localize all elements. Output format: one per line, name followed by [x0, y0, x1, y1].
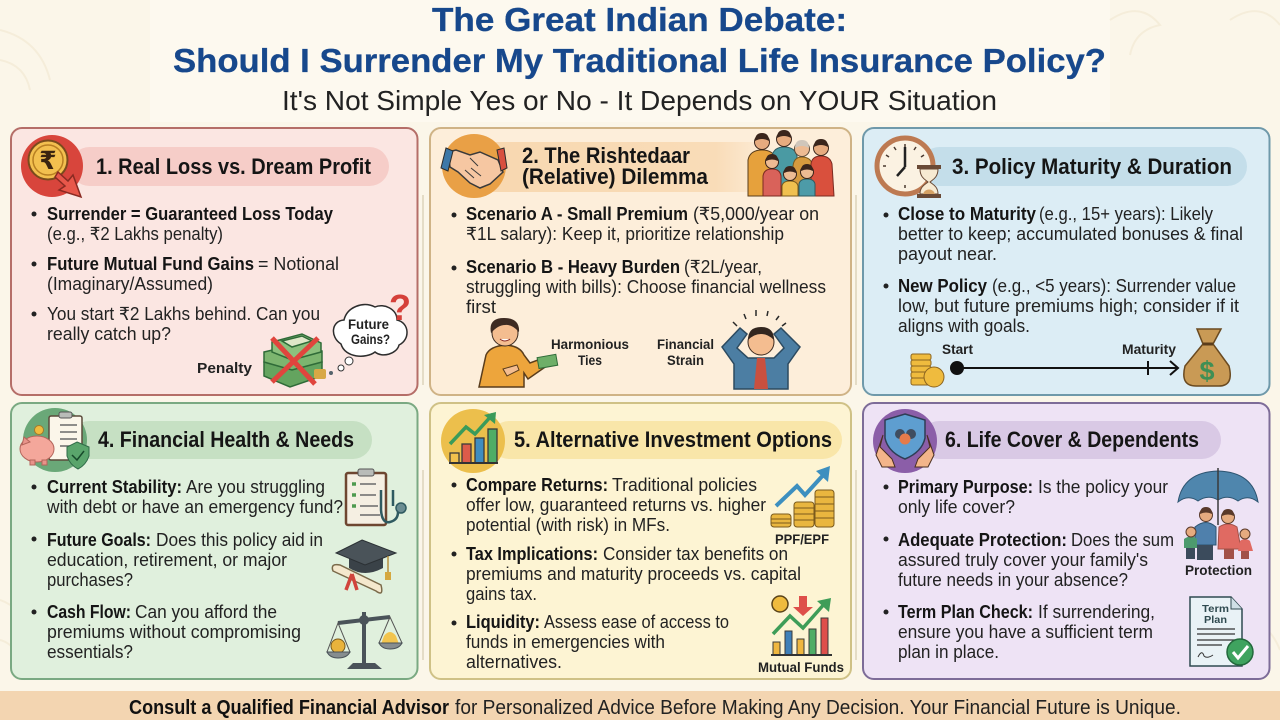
bullets 5: Traditional policies	[612, 475, 757, 495]
bullets 4	[32, 477, 343, 662]
bullets 6: Primary Purpose:	[898, 477, 1033, 497]
icon: clipboard and stethoscope	[346, 469, 406, 525]
icon: mutual funds chart: Mutual Funds	[758, 659, 844, 675]
heading pill 6	[920, 421, 1221, 459]
icon: crossed-out penalty cash: Penalty	[197, 360, 253, 377]
bullets 1: (Imaginary/Assumed)	[47, 274, 213, 294]
bullets 3: better to keep; accumulated bonuses & final	[898, 224, 1243, 244]
bullets 2: Scenario A - Small Premium	[466, 204, 688, 224]
bullets 4: Can you afford the	[135, 602, 277, 622]
icon: PPF/EPF coin growth: PPF/EPF	[775, 531, 829, 547]
timeline arrow: Start	[942, 341, 973, 357]
icon: balance scales	[327, 612, 402, 669]
bullets 3: Close to Maturity	[898, 204, 1036, 224]
bullets 3: (e.g., 15+ years): Likely	[1039, 204, 1213, 224]
label: financial strain	[657, 336, 714, 368]
label: harmonious ties: Ties	[578, 352, 602, 368]
heading pill 5	[490, 421, 842, 459]
bullets 1	[32, 204, 339, 344]
bullets 2: (₹5,000/year on	[693, 204, 819, 224]
icon: graduation cap and diploma	[332, 540, 396, 593]
thought cloud: future gains: ?	[389, 287, 411, 328]
bullets 5: funds in emergencies with	[466, 632, 665, 652]
bullets 4: Current Stability:	[47, 477, 182, 497]
thought cloud: future gains: Gains?	[351, 332, 390, 347]
bullets 5: gains tax.	[466, 584, 537, 604]
heading band 2	[490, 142, 772, 192]
bullets 3: payout near.	[898, 244, 997, 264]
icon: clock and hourglass	[877, 138, 941, 198]
heading pill 5: 5. Alternative Investment Options	[514, 427, 832, 452]
label: harmonious ties: Harmonious	[551, 336, 629, 352]
panel: policy maturity	[863, 128, 1270, 395]
label: financial strain: Strain	[667, 352, 704, 368]
label: harmonious ties	[551, 336, 629, 368]
icon: piggy bank and checklist	[20, 408, 89, 472]
bullets 6: Is the policy your	[1038, 477, 1168, 497]
bullets 1: = Notional	[258, 254, 339, 274]
bullets 4: with debt or have an emergency fund?	[46, 497, 343, 517]
icon: falling rupee coin	[21, 135, 83, 197]
bullets 6	[884, 477, 1174, 662]
bullets 2: first	[466, 297, 496, 317]
icon: money bag: $	[1199, 356, 1215, 386]
bullets 4: premiums without compromising	[47, 622, 301, 642]
bullets 3: (e.g., <5 years): Surrender value	[992, 276, 1236, 296]
bullets 4: Does this policy aid in	[156, 530, 323, 550]
bullets 6: future needs in your absence?	[898, 570, 1128, 590]
bullets 6: Adequate Protection:	[898, 530, 1067, 550]
icon: term plan document: Plan	[1204, 614, 1227, 626]
bullets 6: If surrendering,	[1038, 602, 1155, 622]
panel: rishtedaar dilemma	[430, 128, 851, 395]
bullets 2: Scenario B - Heavy Burden	[466, 257, 680, 277]
footer banner: for Personalized Advice Before Making Any Decision. Your Financial Future is Unique.	[455, 697, 1181, 719]
icon: umbrella over family: Protection	[1185, 562, 1252, 578]
bullets 1: Future Mutual Fund Gains	[47, 254, 254, 274]
bullets 4: Are you struggling	[186, 477, 325, 497]
bullets 5: Liquidity:	[466, 612, 540, 632]
thought cloud: future gains	[329, 287, 411, 375]
icon: money bag	[1184, 329, 1230, 386]
icon: crossed-out penalty cash	[197, 334, 326, 387]
bullets 3: New Policy	[898, 276, 987, 296]
bullets 3: aligns with goals.	[898, 316, 1030, 336]
icon: mutual funds chart	[758, 596, 844, 675]
panel: real loss vs dream profit	[11, 128, 418, 395]
heading band 2: 2. The Rishtedaar	[522, 143, 690, 168]
bullets 5: Assess ease of access to	[544, 612, 729, 632]
bullets 4: essentials?	[47, 642, 133, 662]
heading pill 3: 3. Policy Maturity & Duration	[952, 154, 1232, 179]
bullets 1: You start ₹2 Lakhs behind. Can you	[47, 304, 320, 324]
heading pill 4	[70, 421, 372, 459]
icon: falling rupee coin: ₹	[39, 147, 57, 175]
title	[173, 1, 1106, 79]
panel: alternative investments	[430, 403, 851, 679]
bullets 5: premiums and maturity proceeds vs. capital	[466, 564, 801, 584]
footer banner: Consult a Qualified Financial Advisor	[129, 697, 449, 719]
bullets 3	[884, 204, 1243, 336]
icon: term plan document: Term	[1202, 603, 1229, 615]
bullets 6: plan in place.	[898, 642, 999, 662]
icon: smiling man with cash	[479, 318, 558, 387]
icon: umbrella over family	[1178, 468, 1258, 578]
bullets 6: Does the sum	[1071, 530, 1174, 550]
bullets 2: (₹2L/year,	[684, 257, 762, 277]
bullets 1: Surrender = Guaranteed Loss Today	[47, 204, 333, 224]
bullets 5: Consider tax benefits on	[603, 544, 788, 564]
bullets 2: struggling with bills): Choose financial wellness	[466, 277, 826, 297]
panel: life cover	[863, 403, 1270, 679]
bullets 5: alternatives.	[466, 652, 562, 672]
icon: term plan document	[1190, 597, 1253, 666]
heading pill 3	[920, 147, 1247, 186]
title: Should I Surrender My Traditional Life Insurance Policy?	[173, 42, 1106, 79]
bullets 5: Compare Returns:	[466, 475, 608, 495]
bullets 2	[452, 204, 826, 317]
bullets 5: Tax Implications:	[466, 544, 598, 564]
thought cloud: future gains: Future	[348, 317, 389, 332]
heading pill 1	[70, 147, 389, 186]
timeline arrow: Maturity	[1122, 341, 1176, 357]
title: The Great Indian Debate:	[432, 1, 847, 38]
bullets 2: ₹1L salary): Keep it, prioritize relationship	[466, 224, 784, 244]
subtitle: It's Not Simple Yes or No - It Depends on YOUR Situation	[282, 85, 997, 116]
bullets 6: ensure you have a sufficient term	[898, 622, 1153, 642]
bullets 6: only life cover?	[898, 497, 1015, 517]
icon: family group	[748, 130, 834, 196]
footer banner	[0, 691, 1280, 720]
bullets 1: (e.g., ₹2 Lakhs penalty)	[47, 224, 223, 244]
icon: shield held by hands	[873, 409, 937, 473]
icon: rising bar chart	[441, 409, 505, 473]
panel: financial health	[11, 403, 418, 679]
heading pill 4: 4. Financial Health & Needs	[98, 427, 354, 452]
icon: handshake	[441, 134, 507, 198]
bullets 4: education, retirement, or major	[47, 550, 287, 570]
bullets 1: really catch up?	[47, 324, 171, 344]
bullets 3: low, but future premiums high; consider if it	[898, 296, 1239, 316]
bullets 6: Term Plan Check:	[898, 602, 1033, 622]
bullets 4: Future Goals:	[47, 530, 151, 550]
bullets 5: potential (with risk) in MFs.	[466, 515, 670, 535]
heading pill 6: 6. Life Cover & Dependents	[945, 427, 1199, 452]
bullets 6: assured truly cover your family's	[898, 550, 1148, 570]
icon: stressed man	[722, 310, 800, 389]
bullets 5	[452, 475, 801, 672]
icon: PPF/EPF coin growth	[771, 466, 834, 547]
heading pill 1: 1. Real Loss vs. Dream Profit	[96, 154, 372, 179]
timeline arrow	[942, 341, 1178, 375]
label: financial strain: Financial	[657, 336, 714, 352]
bullets 5: offer low, guaranteed returns vs. higher	[466, 495, 766, 515]
heading band 2: (Relative) Dilemma	[522, 164, 709, 189]
bullets 4: purchases?	[47, 570, 133, 590]
bullets 4: Cash Flow:	[47, 602, 131, 622]
icon: coin stack	[911, 354, 944, 387]
